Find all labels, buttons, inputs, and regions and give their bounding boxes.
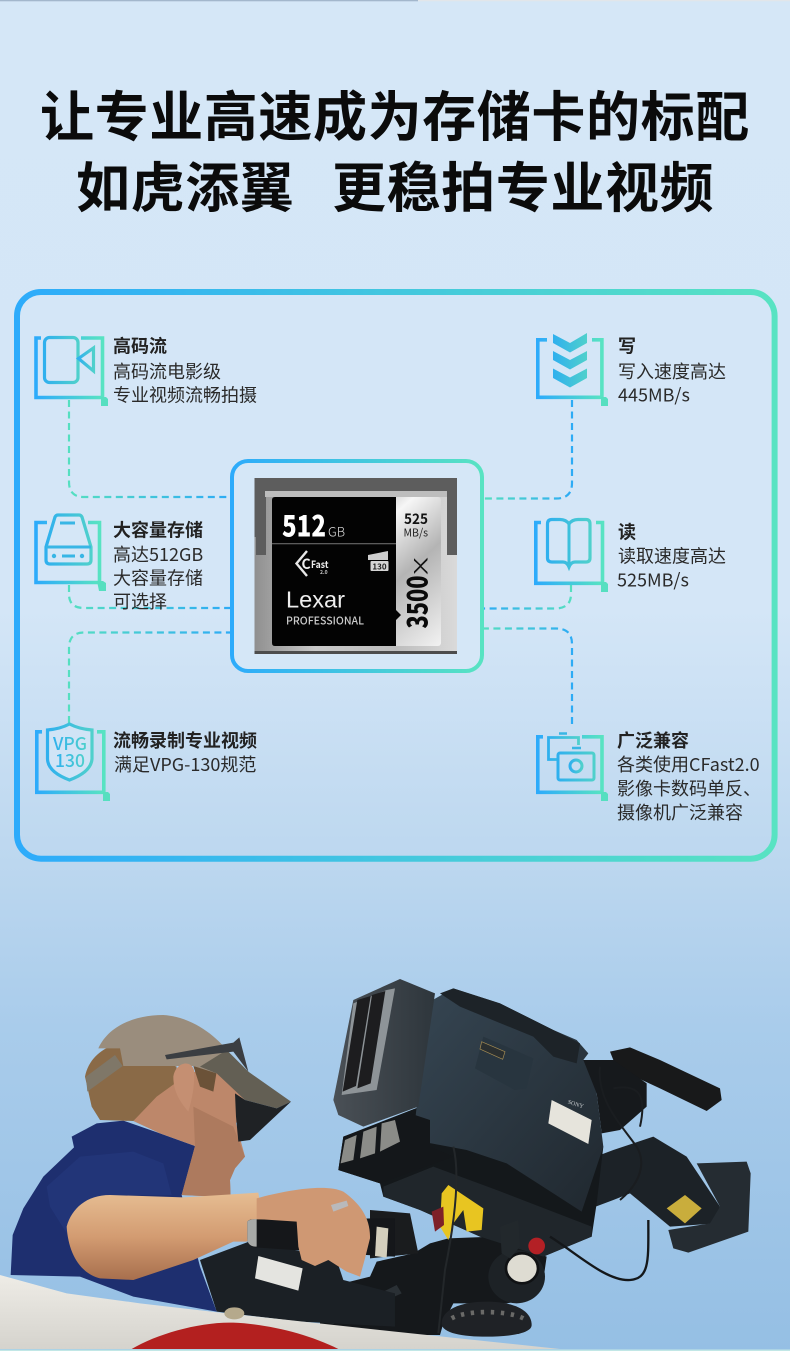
lever [500,1220,520,1258]
title: 如虎添翼 [76,144,294,223]
text: high bitrate: 高码流 [113,332,167,358]
center outline [232,461,482,671]
lens warning label [667,1195,702,1223]
text: write speed [618,332,726,408]
memory card: MB/s [404,524,428,540]
text: read speed: 读取速度高达 [618,542,726,568]
bowl [442,1302,532,1337]
model badge [480,1042,505,1059]
text: large capacity [113,516,203,614]
stubble [182,1107,245,1197]
icon: shield: VPG [52,731,87,756]
red clamp [432,1207,444,1232]
cap crown [98,1015,247,1073]
feature: write speed [538,332,726,408]
text: compatibility: 广泛兼容 [617,727,689,753]
neck and face [133,1070,245,1197]
red knob [528,1238,545,1254]
memory card: 130 [372,561,387,572]
lens barrel [587,1137,720,1227]
yellow strap [440,1185,483,1240]
bottom edge strip [0,1350,790,1351]
text: write speed: 写 [618,332,636,358]
hand [257,1188,370,1277]
ear [173,1063,194,1112]
grip [247,1218,395,1257]
icon: chevrons [538,333,608,406]
text: read speed [617,518,726,592]
text: high bitrate [113,332,257,408]
feature: read speed [536,518,726,592]
top edge strip [0,0,790,1]
memory card: x [400,556,436,575]
text: VPG-130: 流畅录制专业视频 [113,727,257,753]
icon: video camera [36,338,108,406]
microphone [610,1047,722,1111]
viewfinder block [333,979,435,1127]
fluid head [488,1250,545,1303]
memory card: 525 [404,509,428,529]
ring [331,1201,348,1212]
memory card [254,478,457,654]
camera back body behind man [200,1240,395,1327]
memory card: 512 [282,504,326,546]
banner snap [224,1307,244,1319]
memory card: PROFESSIONAL [286,612,364,628]
text: large capacity: 可选择 [113,588,167,614]
grip cap [247,1219,257,1247]
icon: cameras [538,734,608,801]
connector panel [338,1113,453,1183]
memory card: GB [328,522,345,540]
top handle [440,988,580,1063]
memory card: Lexar [286,587,345,613]
text: compatibility: 摄像机广泛兼容 [617,799,743,825]
velcro strip 2 [357,991,385,1088]
cable vertical [438,1147,456,1333]
dots on drive [52,554,84,558]
center panel: memory card [232,461,482,671]
hair [85,1045,177,1121]
block silver face [342,988,395,1095]
cable loop [600,1067,642,1200]
icon: shield [37,724,110,801]
panel: features [17,292,775,859]
connector silver details [341,1120,400,1163]
label on body [255,1256,303,1291]
head label [506,1253,538,1283]
text: read speed: 读 [618,518,636,544]
velcro strip 1 [343,996,371,1092]
sleeve highlight [47,1152,172,1233]
text: large capacity: 大容量存储 [113,516,203,542]
memory card: Fast [311,556,329,571]
banner [0,1275,560,1349]
title: 更稳拍专业视频 [332,144,714,223]
tripod arm highlight [323,1285,402,1324]
bowl ridges [452,1312,523,1318]
grip band [375,1227,388,1258]
panel outline [17,292,775,859]
tripod head plate [383,1167,592,1257]
title [40,73,750,223]
text: large capacity: 大容量存储 [113,564,203,590]
icon: hard drive [36,515,106,591]
text: write speed: 写入速度高达 [618,358,726,384]
text: compatibility: 影像卡数码单反、 [617,775,761,801]
shirt [11,1121,217,1312]
text: compatibility [617,727,761,825]
memory card: 2.0 [320,569,328,576]
cap strap [86,1055,123,1092]
photo: video camera [320,979,751,1337]
connector lines [69,400,572,724]
text: VPG-130 [113,727,257,777]
rear lens and mic mount [553,1060,647,1133]
photo: man operating camera [0,1015,560,1349]
text: read speed: 525MB/s [617,566,689,592]
under brim [235,1093,291,1142]
text: compatibility: 各类使用CFast2.0 [617,751,760,777]
icon: open book [536,520,608,592]
memory card: C [302,554,311,574]
text: high bitrate: 高码流电影级 [113,358,221,384]
cap brim [200,1050,291,1108]
lens hood [668,1162,751,1253]
camera body [413,988,603,1212]
icon: shield: 130 [55,748,85,773]
SONY text: SONY [567,1100,585,1110]
cable long [550,1220,648,1280]
dark base under body [338,1107,603,1257]
text: write speed: 445MB/s [618,382,690,408]
body label [548,1100,592,1144]
title: 让专业高速成为存储卡的标配 [40,73,750,152]
tripod mass [320,1237,547,1335]
text: large capacity: 高达512GB [113,541,203,567]
text: high bitrate: 专业视频流畅拍摄 [113,382,257,408]
feature: compatibility [538,727,761,825]
memory card: 3500 [396,576,436,628]
feature: VPG-130 [37,724,257,801]
text: VPG-130: 满足VPG-130规范 [114,751,256,777]
grip ring [370,1210,418,1258]
arm [67,1193,263,1280]
sunglasses [165,1037,248,1072]
banner red circle [132,1323,338,1349]
side panel [475,1037,533,1090]
feature: high bitrate [36,332,257,408]
sideburn [193,1066,217,1092]
feature: large capacity [36,515,203,614]
